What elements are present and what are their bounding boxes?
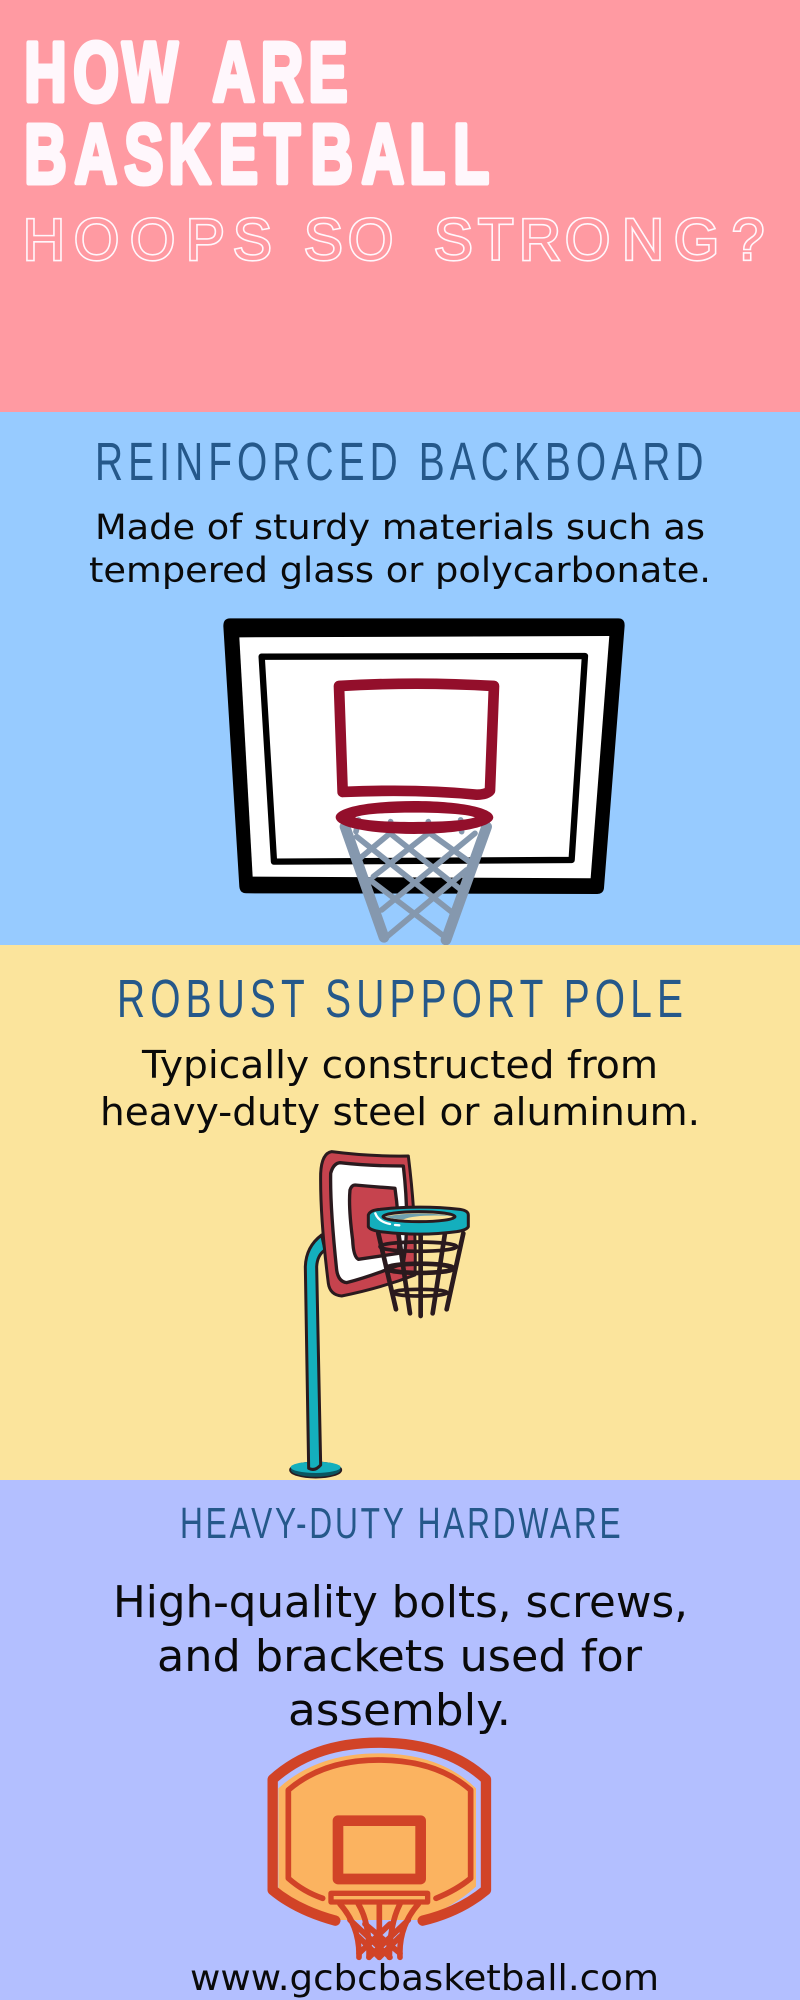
subtitle outlined: hoops so strong: HOOPS SO STRONG?	[23, 208, 764, 272]
subtitle outlined: hoops so strong: HOOPS SO STRONG?	[23, 208, 764, 272]
body text: pole materials: Typically constructed from	[141, 1043, 658, 1087]
panel: title header	[0, 0, 800, 412]
body text: backboard materials	[89, 508, 711, 591]
body text: hardware description: assembly.	[288, 1685, 511, 1736]
panel: robust support pole	[0, 945, 800, 1480]
title heavy lines: BASKETBALL	[24, 108, 489, 202]
panel: heavy-duty hardware	[0, 1480, 800, 2000]
body text: backboard materials: tempered glass or polycarbonate.	[89, 551, 711, 591]
website url: www.gcbcbasketball.com	[190, 1958, 659, 1999]
body text: pole materials	[100, 1043, 700, 1134]
heading: reinforced backboard: REINFORCED BACKBOARD	[95, 431, 703, 491]
icon: backboard with hoop	[223, 618, 625, 940]
body text: hardware description: High-quality bolts, screws,	[113, 1577, 688, 1628]
body text: hardware description: and brackets used for	[157, 1631, 643, 1682]
title heavy lines	[24, 26, 489, 202]
heading: robust support pole: ROBUST SUPPORT POLE	[117, 968, 683, 1028]
panel: reinforced backboard	[0, 412, 800, 945]
heading: heavy-duty hardware: HEAVY-DUTY HARDWARE	[180, 1499, 621, 1548]
body text: backboard materials: Made of sturdy materials such as	[95, 508, 705, 548]
title heavy lines: HOW ARE	[24, 26, 348, 120]
body text: hardware description	[113, 1577, 688, 1736]
icon: orange backboard with net	[273, 1743, 486, 1957]
body text: pole materials: heavy-duty steel or aluminum.	[100, 1090, 700, 1134]
icon: hoop on teal pole	[290, 1152, 468, 1478]
